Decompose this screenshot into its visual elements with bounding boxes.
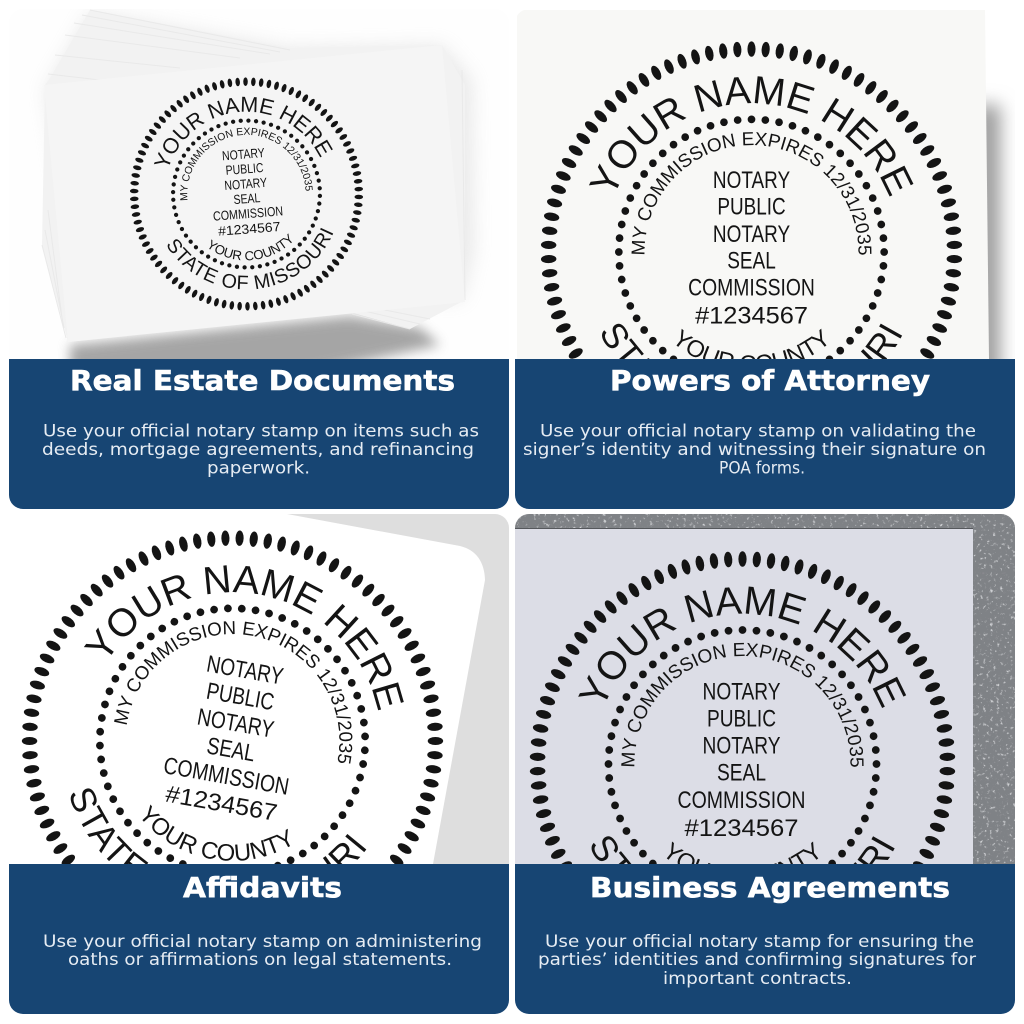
description: Use your official notary stamp on items such as (43, 422, 479, 442)
description: Use your official notary stamp on validating the (540, 422, 976, 442)
description: deeds, mortgage agreements, and refinancing (42, 440, 474, 460)
description (538, 932, 976, 989)
stamp impression: Missouri seal: STATE OF MISSOURI (168, 228, 334, 290)
stamp impression: STATE OF MISSOURI (592, 836, 895, 864)
stamp impression: YOUR NAME HERE (84, 565, 404, 710)
panel: affidavits (9, 514, 509, 1014)
stamp impression: YOUR COUNTY (666, 842, 818, 864)
stamp impression: STATE OF MISSOURI (602, 324, 902, 359)
stamp impression: Missouri seal: NOTARY (224, 175, 268, 193)
stamp impression: MY COMMISSION EXPIRES 12/31/2035 (114, 621, 352, 764)
stamp impression: Missouri seal (130, 77, 363, 311)
description: important contracts. (663, 969, 852, 989)
stamp impression: #1234567 (164, 781, 279, 827)
photo: rounded paper on grey (288, 514, 509, 864)
description (42, 422, 479, 478)
stamp impression: MY COMMISSION EXPIRES 12/31/2035 (632, 132, 872, 255)
description (43, 932, 482, 970)
stamp impression: YOUR NAME HERE (588, 76, 914, 196)
stamp impression: COMMISSION (688, 275, 815, 302)
panel: powers of attorney (515, 10, 1015, 509)
caption box (515, 864, 1015, 1014)
description: POA forms. (719, 458, 805, 478)
stamp impression: Missouri seal: SEAL (233, 190, 261, 207)
stamp impression: Missouri seal: MY COMMISSION EXPIRES 12/31/2035 (180, 128, 313, 200)
stamp impression: Missouri seal: #1234567 (218, 219, 281, 239)
description: Use your official notary stamp on administering (43, 932, 482, 952)
description: signer’s identity and witnessing their signature on (523, 440, 986, 460)
heading: Powers of Attorney (610, 364, 930, 397)
stamp impression: COMMISSION (678, 787, 806, 814)
stamp impression (22, 530, 444, 864)
panel: real estate documents (9, 10, 509, 509)
stamp impression: COMMISSION (161, 752, 291, 801)
heading: Affidavits (183, 871, 342, 904)
stamp impression: PUBLIC (707, 705, 776, 732)
stamp impression: PUBLIC (204, 678, 276, 716)
stamp impression (540, 41, 962, 359)
stamp impression: Missouri seal: YOUR NAME HERE (154, 96, 333, 164)
photo: paper with shadow (517, 10, 1012, 359)
stamp impression (530, 551, 956, 864)
caption box (9, 359, 509, 509)
stamp impression: Missouri seal: NOTARY (221, 145, 265, 163)
heading: Business Agreements (590, 871, 950, 904)
stamp impression: NOTARY (713, 167, 790, 194)
stamp impression: NOTARY (195, 704, 276, 744)
caption box (9, 864, 509, 1014)
stamp impression: YOUR COUNTY (676, 328, 826, 359)
stamp impression: NOTARY (713, 221, 790, 248)
stamp impression: MY COMMISSION EXPIRES 12/31/2035 (621, 642, 864, 767)
stamp impression: NOTARY (702, 678, 780, 705)
description: oaths or affirmations on legal statements. (68, 950, 452, 970)
heading: Real Estate Documents (70, 364, 455, 397)
stamp impression: SEAL (717, 760, 766, 787)
stamp impression: #1234567 (685, 815, 798, 842)
stamp impression: #1234567 (695, 302, 808, 329)
photo: paper on concrete (515, 514, 1015, 864)
caption box (515, 359, 1015, 509)
description: parties’ identities and confirming signatures for (538, 950, 976, 970)
stamp impression: NOTARY (702, 733, 780, 760)
stamp impression: YOUR NAME HERE (578, 586, 906, 708)
stamp impression: SEAL (727, 248, 776, 275)
stamp impression: YOUR COUNTY (142, 804, 290, 861)
stamp impression: NOTARY (205, 651, 285, 691)
photo: stack of stamped cards (42, 10, 477, 359)
stamp impression: SEAL (205, 732, 257, 767)
stamp impression: Missouri seal: YOUR COUNTY (209, 233, 292, 260)
stamp impression: STATE OF MISSOURI (70, 788, 366, 864)
stamp impression: Missouri seal: PUBLIC (225, 160, 264, 178)
panel: business agreements (515, 514, 1015, 1014)
stamp impression: PUBLIC (717, 194, 786, 221)
stamp impression: Missouri seal: COMMISSION (212, 203, 284, 224)
description: Use your official notary stamp for ensuring the (545, 932, 974, 952)
description (524, 424, 984, 474)
description: paperwork. (207, 458, 310, 478)
